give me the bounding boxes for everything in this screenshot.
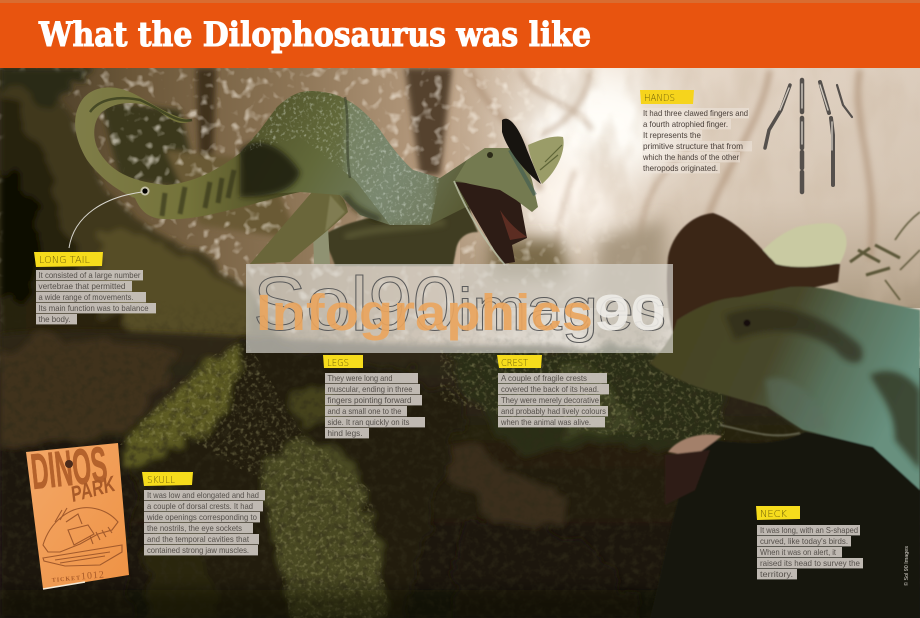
light crest xyxy=(763,223,846,267)
text: skull: contained strong jaw muscles. xyxy=(147,545,249,555)
label: long tail: LONG TAIL xyxy=(39,255,90,266)
text: long tail: a wide range of movements. xyxy=(38,292,134,302)
text: legs: fingers pointing forward xyxy=(328,395,412,405)
text: hands: primitive structure that from xyxy=(643,141,743,151)
label: neck: NECK xyxy=(760,509,788,520)
text: hands: a fourth atrophied finger. xyxy=(643,119,728,129)
text: neck: When it was on alert, it xyxy=(760,547,837,557)
text: crest: and probably had lively colours xyxy=(501,406,606,416)
head xyxy=(650,287,920,490)
text: neck xyxy=(757,525,863,579)
text: hands: It represents the xyxy=(643,130,701,140)
front crest xyxy=(502,119,541,184)
chest and belly xyxy=(322,206,478,266)
foreground dilophosaurus xyxy=(650,213,920,618)
shrub at right xyxy=(850,212,920,300)
callout: skull xyxy=(142,472,265,555)
watermark word: Infographics xyxy=(256,284,593,341)
text: long tail xyxy=(36,270,156,324)
callout: neck xyxy=(756,506,863,579)
moss highlights xyxy=(120,339,725,618)
text: skull: It was low and elongated and had xyxy=(147,490,259,500)
head xyxy=(455,148,538,212)
text: neck: raised its head to survey the xyxy=(760,558,860,568)
foreground neck xyxy=(650,432,920,618)
canopy light flecks xyxy=(0,68,638,342)
rear crest xyxy=(528,137,564,184)
text: crest: covered the back of its head. xyxy=(501,384,599,394)
title banner xyxy=(0,0,920,68)
text: legs: hind legs. xyxy=(328,428,362,438)
text: legs: and a small one to the xyxy=(328,406,402,416)
panel: watermark xyxy=(246,262,673,353)
text: neck: territory. xyxy=(760,569,793,579)
text: legs: muscular, ending in three xyxy=(328,384,413,394)
outlined logo: Sol90 xyxy=(253,262,457,347)
label: crest: CREST xyxy=(501,358,528,369)
text: crest: A couple of fragile crests xyxy=(501,373,587,383)
mossy stump xyxy=(120,338,470,618)
text: hands: It had three clawed fingers and xyxy=(643,108,748,118)
dark trunks xyxy=(100,68,452,240)
forest floor xyxy=(0,329,776,417)
text: long tail: It consisted of a large number xyxy=(38,270,141,280)
prey hand xyxy=(668,435,722,454)
pin hole xyxy=(65,460,73,468)
open mouth xyxy=(455,182,527,264)
text: long tail: the body. xyxy=(38,314,70,324)
hump xyxy=(667,213,840,345)
text: legs: They were long and xyxy=(328,373,393,383)
icon: hand bones xyxy=(765,80,852,192)
text: skull: the nostrils, the eye sockets xyxy=(147,523,242,533)
torso xyxy=(240,91,505,225)
text: legs xyxy=(325,373,425,438)
text: skull: a couple of dorsal crests. It had xyxy=(147,501,253,511)
body shadow xyxy=(240,142,300,197)
hind leg xyxy=(250,186,348,264)
main dilophosaurus xyxy=(75,87,564,266)
callout: long tail xyxy=(34,252,156,324)
icon: skull sketch xyxy=(43,508,122,566)
scaly skin xyxy=(320,95,435,225)
text: skull: and the temporal cavities that xyxy=(147,534,250,544)
callout: legs xyxy=(323,355,425,438)
text: neck: It was long, with an S-shaped xyxy=(760,525,858,535)
thin front leg xyxy=(313,227,330,264)
label: legs: LEGS xyxy=(327,358,349,369)
text: skull: wide openings corresponding to xyxy=(146,512,257,522)
label: skull: SKULL xyxy=(147,475,175,486)
ticket: Dinos Park xyxy=(26,436,129,589)
pale tree silhouettes xyxy=(519,68,890,301)
text: hands: theropods originated. xyxy=(643,163,718,173)
text: legs: side. It ran quickly on its xyxy=(328,417,410,427)
text: crest: when the animal was alive. xyxy=(500,417,591,427)
misty sky xyxy=(0,68,920,368)
watermark number: 90 xyxy=(594,284,666,341)
ground shading texture xyxy=(0,316,920,606)
outlined logo suffix: images xyxy=(458,276,666,343)
title banner: What the Dilophosaurus was like xyxy=(38,15,591,55)
label: hands: HANDS xyxy=(644,93,675,104)
text: neck: curved, like today's birds. xyxy=(760,536,848,546)
ticket number: TICKET1012 xyxy=(51,569,105,585)
text: crest xyxy=(498,373,609,427)
ticket subheading: PARK xyxy=(68,471,119,507)
text: hands xyxy=(642,108,752,173)
text: hands: which the hands of the other xyxy=(642,152,739,162)
callout: hands xyxy=(640,90,752,173)
text: crest: They were merely decorative xyxy=(501,395,599,405)
ticket: Dinos Park: DINOS xyxy=(28,436,110,500)
text: long tail: vertebrae that permitted xyxy=(38,281,126,291)
tail callout line xyxy=(69,186,150,248)
callout: crest xyxy=(497,355,609,427)
image credit: © Sol 90 Images xyxy=(903,546,910,586)
left hillside xyxy=(0,68,282,349)
text: long tail: Its main function was to balance xyxy=(38,303,149,313)
text: skull xyxy=(144,490,265,555)
tail xyxy=(75,87,300,219)
